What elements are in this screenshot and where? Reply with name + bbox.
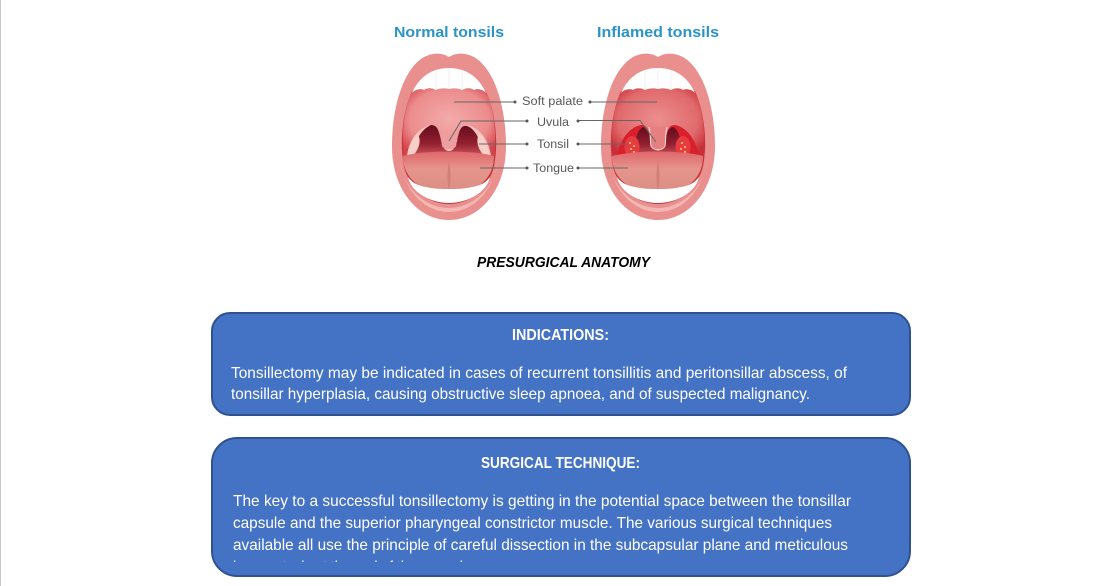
uvula (649, 127, 667, 150)
panel: indications (212, 313, 910, 415)
illustration: normal mouth (392, 54, 506, 220)
tongue (403, 152, 494, 190)
anatomy labels and leader lines (449, 96, 657, 175)
upper teeth (412, 68, 486, 93)
palate (403, 88, 495, 158)
panel: surgical technique (212, 438, 910, 576)
throat (633, 127, 683, 156)
text: surgical technique body (233, 494, 851, 562)
upper teeth (621, 68, 695, 93)
mouth interior (402, 92, 496, 204)
tongue (612, 152, 703, 190)
palate (612, 88, 704, 158)
text: surgical technique body: The key to a successful tonsillectomy is getting in the potential space between the tonsillar (233, 493, 852, 510)
heading: inflamed tonsils: Inflamed tonsils (597, 25, 719, 41)
illustration: inflamed mouth (601, 54, 715, 220)
page edge line (0, 0, 1, 586)
heading: normal tonsils: Normal tonsils (394, 25, 504, 41)
anatomy labels and leader lines: Tonsil (537, 139, 569, 151)
anatomy labels and leader lines: Tongue (533, 163, 574, 175)
anatomy labels and leader lines: Soft palate (522, 96, 583, 108)
mouth interior (611, 92, 705, 204)
heading: indications: INDICATIONS: (512, 327, 609, 344)
uvula (441, 132, 457, 149)
text: indications body: tonsillar hyperplasia, causing obstructive sleep apnoea, and of suspected malignancy. (231, 386, 810, 403)
text: surgical technique body: capsule and the superior pharyngeal constrictor muscle. The various surgical techniques (233, 515, 832, 532)
tonsils (408, 134, 420, 156)
inflamed arches (617, 125, 699, 156)
lower teeth (617, 177, 699, 203)
tonsillar pillars (407, 125, 491, 156)
inflamed tonsils (624, 136, 690, 158)
text: surgical technique body: haemostasis at the end of the procedure. (233, 559, 487, 576)
heading: surgical technique: SURGICAL TECHNIQUE: (481, 455, 640, 472)
anatomy labels and leader lines: Uvula (537, 117, 570, 129)
text: surgical technique body: available all use the principle of careful dissection in the subcapsular plane and meticulous (233, 537, 848, 554)
text: indications body (231, 365, 848, 403)
lower teeth (408, 177, 490, 203)
caption: presurgical anatomy: PRESURGICAL ANATOMY (477, 254, 652, 271)
throat (413, 125, 483, 156)
text: indications body: Tonsillectomy may be indicated in cases of recurrent tonsillitis and peritonsillar abscess, of (231, 365, 848, 382)
